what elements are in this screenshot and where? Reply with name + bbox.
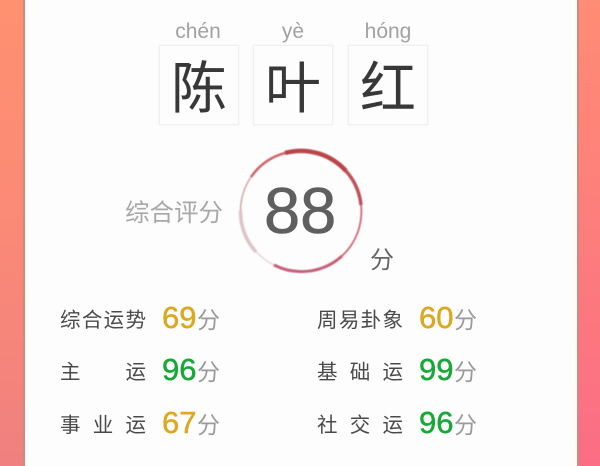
score row: zhu yun: 运	[126, 361, 146, 384]
score row: zonghe yunshi: 综	[60, 309, 80, 332]
score row: jichu yun: 99	[419, 352, 453, 387]
pinyin: ye: yè	[282, 20, 304, 43]
pinyin: chen: chén	[175, 20, 221, 43]
score row: zhu yun: 分	[197, 359, 220, 385]
score row: zhu yun	[60, 352, 220, 387]
score row: jichu yun: 基	[317, 361, 338, 384]
score row: jichu yun: 运	[382, 361, 403, 384]
score row: zhouyi guaxiang: 象	[382, 309, 403, 332]
score row: shejiao yun: 分	[454, 412, 477, 438]
score row: shejiao yun: 运	[382, 414, 403, 437]
pinyin: hong: hóng	[365, 20, 411, 43]
score row: zonghe yunshi	[60, 300, 220, 335]
score row: jichu yun: 分	[454, 359, 477, 385]
score unit: 分	[370, 247, 394, 274]
score row: shejiao yun: 96	[419, 405, 453, 440]
score row: shiye yun: 67	[162, 405, 196, 440]
name box: chen: 陈	[171, 57, 227, 120]
score row: zonghe yunshi: 运	[104, 309, 124, 332]
left background strip	[0, 0, 25, 466]
score row: zonghe yunshi: 合	[82, 309, 102, 332]
right background strip	[577, 0, 600, 466]
score row: jichu yun	[317, 352, 477, 387]
score row: shiye yun: 分	[197, 412, 220, 438]
score row: zonghe yunshi: 势	[125, 309, 146, 332]
score row: zonghe yunshi: 分	[197, 307, 220, 333]
score row: zhouyi guaxiang: 易	[339, 309, 359, 332]
name box: hong: 红	[360, 57, 416, 120]
score row: shiye yun: 业	[93, 414, 113, 437]
score row: zhouyi guaxiang: 分	[454, 307, 477, 333]
name box: chen	[159, 45, 239, 125]
name box: ye	[253, 45, 333, 125]
name box: hong	[348, 45, 428, 125]
overall score label: 综合评分	[125, 200, 223, 227]
score row: zonghe yunshi: 69	[162, 300, 196, 335]
score row: shiye yun: 事	[60, 414, 80, 437]
score row: zhu yun: 主	[60, 361, 80, 384]
score ring	[238, 148, 364, 274]
score row: jichu yun: 础	[350, 361, 370, 384]
score row: zhouyi guaxiang: 卦	[361, 309, 381, 332]
score row: zhouyi guaxiang: 周	[317, 309, 338, 332]
score row: shejiao yun	[317, 405, 477, 440]
score row: shejiao yun: 交	[350, 414, 370, 437]
score row: shiye yun	[60, 405, 220, 440]
overall score number: 88	[264, 174, 336, 247]
score row: zhu yun: 96	[162, 352, 196, 387]
score row: zhouyi guaxiang	[317, 300, 477, 335]
score row: shejiao yun: 社	[317, 414, 338, 437]
score row: shiye yun: 运	[126, 414, 146, 437]
score row: zhouyi guaxiang: 60	[419, 300, 453, 335]
name box: ye: 叶	[265, 57, 321, 120]
